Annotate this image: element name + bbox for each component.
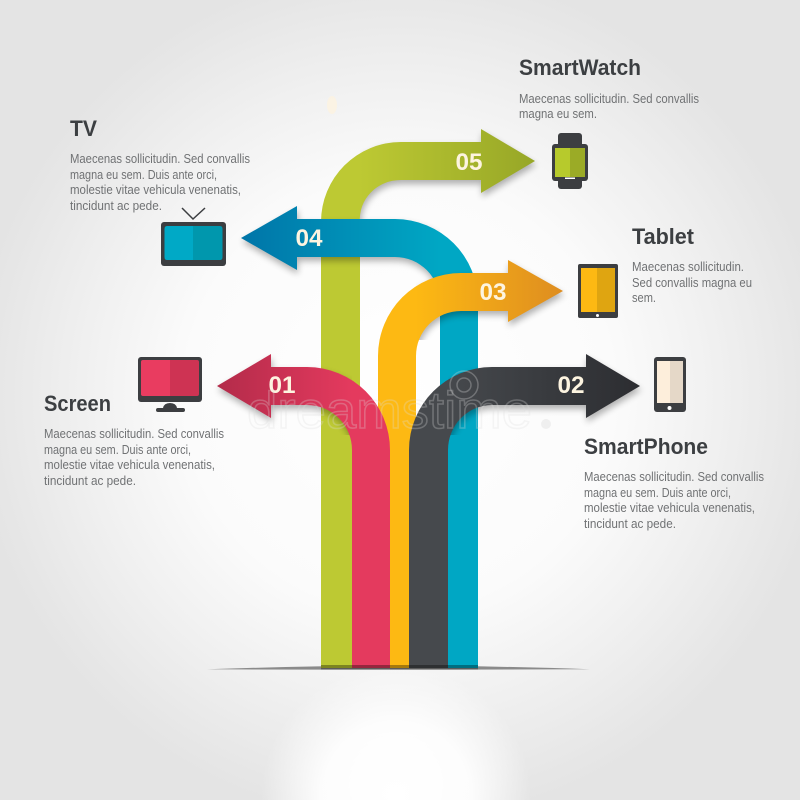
arrow 01: red [217, 354, 391, 672]
text block: SmartPhone: Maecenas sollicitudin. Sed convallis [584, 470, 764, 484]
text block: SmartWatch: magna eu sem. [519, 107, 597, 121]
text block: TV [70, 116, 250, 213]
text block: Tablet: sem. [632, 291, 656, 305]
text block: TV: molestie vitae vehicula venenatis, [70, 183, 241, 197]
ground shadow [207, 666, 590, 670]
text block: Screen [44, 391, 224, 488]
text block: TV: Maecenas sollicitudin. Sed convallis [70, 152, 250, 166]
text block: SmartPhone: SmartPhone [584, 434, 708, 459]
text block: Screen: Maecenas sollicitudin. Sed convallis [44, 427, 224, 441]
icon: TV [161, 208, 226, 266]
arrow 02: dark [409, 354, 641, 672]
icon: smartphone [654, 357, 686, 412]
icon: smartwatch [552, 133, 588, 189]
number 03: 03 [480, 279, 506, 306]
arrow 05: green [321, 129, 536, 672]
icon: screen [138, 357, 202, 412]
number 05: 05 [456, 149, 482, 176]
arrow 04: blue [241, 206, 479, 672]
text block: SmartWatch: Maecenas sollicitudin. Sed convallis [519, 92, 699, 106]
ground contact band [321, 665, 478, 670]
text block: Screen: Screen [44, 391, 111, 416]
text block: TV: tincidunt ac pede. [70, 199, 162, 213]
text block: TV: TV [70, 116, 97, 141]
text block: SmartPhone: molestie vitae vehicula venenatis, [584, 501, 755, 515]
text block: Tablet: Sed convallis magna eu [632, 276, 752, 290]
text block: SmartPhone: tincidunt ac pede. [584, 517, 676, 531]
text block: Screen: molestie vitae vehicula venenatis, [44, 458, 215, 472]
text block: Tablet [632, 224, 752, 305]
text block: SmartPhone: magna eu sem. Duis ante orci, [584, 486, 731, 500]
arrow 03: yellow [378, 260, 564, 672]
text block: Screen: magna eu sem. Duis ante orci, [44, 443, 191, 457]
text block: Tablet: Tablet [632, 224, 695, 249]
text block: TV: magna eu sem. Duis ante orci, [70, 168, 217, 182]
number 02: 02 [558, 372, 584, 399]
text block: Screen: tincidunt ac pede. [44, 474, 136, 488]
number 04: 04 [296, 225, 323, 252]
text block: SmartPhone [584, 434, 764, 531]
text block: SmartWatch [519, 55, 699, 121]
icon: tablet [578, 264, 618, 318]
text block: SmartWatch: SmartWatch [519, 55, 641, 80]
text block: Tablet: Maecenas sollicitudin. [632, 260, 744, 274]
number 01: 01 [268, 372, 296, 399]
watermark: dreamstime [247, 382, 532, 440]
